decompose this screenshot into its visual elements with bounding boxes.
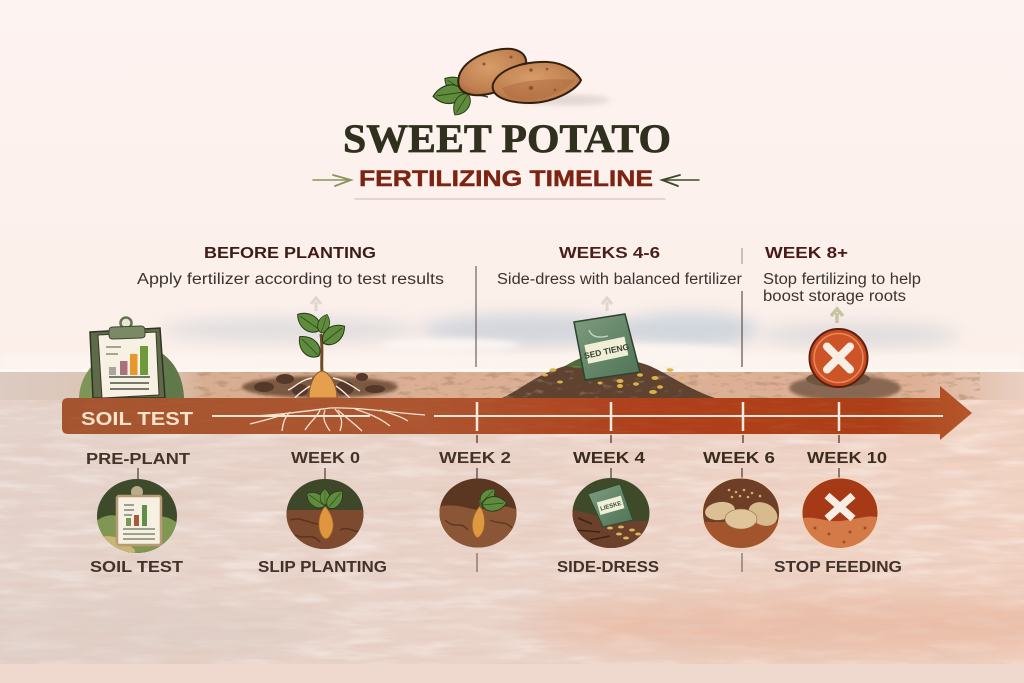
arrow: small up, weeks 4-6 xyxy=(602,298,612,311)
week labels: WEEK 2 xyxy=(439,450,511,467)
icon: stop badge on soil xyxy=(789,329,901,401)
timeline arrow bar xyxy=(62,386,972,440)
circle icon: soil test xyxy=(95,479,180,555)
icon: green hill and clipboard xyxy=(79,318,184,400)
icon: fertilizer mound and bag: SED TIENG xyxy=(583,341,630,361)
stage heading: week 8+: Stop fertilizing to help xyxy=(763,271,921,288)
stage heading: weeks 4-6: Side-dress with balanced fertilizer xyxy=(497,271,742,288)
stage heading: before planting: BEFORE PLANTING xyxy=(204,245,376,262)
illustration: potatoes with leaves xyxy=(432,49,610,119)
circle icon: side-dress xyxy=(572,478,650,548)
step labels xyxy=(90,559,902,576)
week labels: PRE-PLANT xyxy=(86,451,191,468)
stage heading: weeks 4-6 xyxy=(497,245,742,288)
icon: sprouting sweet potato slip xyxy=(242,308,398,398)
circle icon: slip planting xyxy=(285,479,365,552)
stage heading: weeks 4-6: WEEKS 4-6 xyxy=(559,245,660,262)
arrow: small up, before planting xyxy=(311,298,321,311)
step labels: SIDE-DRESS xyxy=(557,559,659,576)
subtitle ornaments xyxy=(313,175,699,199)
stage heading: week 8+: WEEK 8+ xyxy=(765,245,848,262)
stage heading: week 8+: boost storage roots xyxy=(763,288,906,305)
roots in bar xyxy=(212,408,425,431)
week labels: WEEK 0 xyxy=(291,450,360,467)
subtitle: FERTILIZING TIMELINE xyxy=(359,166,653,191)
icon: fertilizer mound and bag xyxy=(502,314,715,398)
step labels: SOIL TEST xyxy=(90,559,184,576)
week labels xyxy=(86,450,887,468)
week labels: WEEK 6 xyxy=(703,450,775,467)
stage heading: week 8+ xyxy=(763,245,921,305)
circle icon: week 6 potatoes xyxy=(700,478,782,550)
bar label: soil test: SOIL TEST xyxy=(81,408,194,429)
step labels: SLIP PLANTING xyxy=(258,559,387,576)
title: SWEET POTATO xyxy=(343,116,671,161)
circle icon: stop feeding xyxy=(802,478,878,548)
circle icon: side-dress: LIESKE xyxy=(600,501,622,513)
circle icon: week 2 sprout xyxy=(438,478,518,550)
step labels: STOP FEEDING xyxy=(774,559,902,576)
week labels: WEEK 10 xyxy=(807,450,887,467)
stage heading: before planting xyxy=(137,245,444,288)
stage heading: before planting: Apply fertilizer according to test results xyxy=(137,271,444,288)
week labels: WEEK 4 xyxy=(573,450,645,467)
arrow: small up, week 8+ xyxy=(831,309,843,323)
